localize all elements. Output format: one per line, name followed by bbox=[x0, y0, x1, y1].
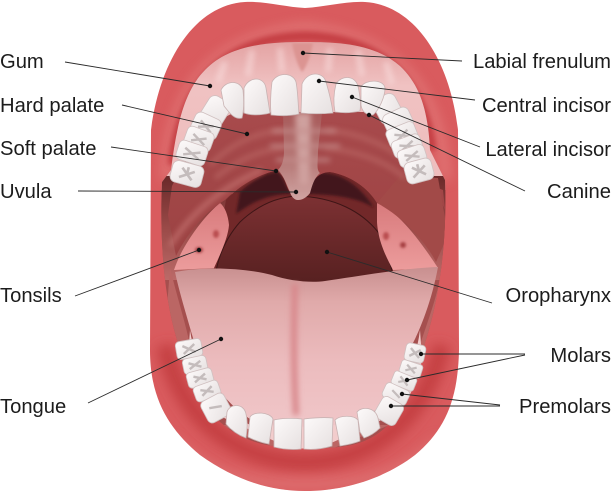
labels: right: Lateral incisor bbox=[485, 139, 611, 161]
labels: left: Hard palate bbox=[0, 95, 104, 117]
labels: left: Tongue bbox=[0, 396, 66, 418]
tonsil: left bbox=[174, 203, 229, 270]
back of the throat bbox=[214, 172, 393, 271]
labels: left: Tonsils bbox=[0, 285, 62, 307]
leader lines bbox=[65, 53, 525, 406]
labial frenulum bbox=[292, 43, 313, 72]
labels: right: Central incisor bbox=[482, 95, 611, 117]
oropharynx bbox=[214, 196, 395, 285]
labels: right: Oropharynx bbox=[506, 285, 611, 307]
lower incisors bbox=[226, 405, 380, 449]
labels: left bbox=[0, 51, 104, 418]
leader dots bbox=[197, 51, 423, 408]
tonsil: right bbox=[377, 203, 438, 270]
upper molars right bbox=[371, 91, 435, 185]
tongue bbox=[175, 267, 438, 427]
lower molars left bbox=[175, 338, 233, 425]
side walls of the throat bbox=[161, 176, 232, 280]
upper molars left bbox=[169, 93, 233, 189]
lips bbox=[150, 2, 459, 491]
upper gum bbox=[162, 42, 446, 190]
upper incisors bbox=[221, 74, 385, 118]
hard palate bbox=[168, 112, 445, 256]
labels: right: Canine bbox=[547, 181, 611, 203]
mouth interior bbox=[161, 42, 446, 448]
uvula and palatal raphe bbox=[270, 113, 340, 200]
lower molars right bbox=[373, 342, 427, 427]
labels: left: Soft palate bbox=[0, 138, 97, 160]
labels: right: Premolars bbox=[519, 396, 611, 418]
labels: left: Gum bbox=[0, 51, 44, 73]
illustration: open mouth bbox=[150, 2, 460, 491]
labels: right: Molars bbox=[550, 345, 611, 367]
labels: left: Uvula bbox=[0, 181, 52, 203]
floor of the mouth and lower gum bbox=[168, 280, 438, 448]
labels: right bbox=[473, 51, 611, 418]
labels: right: Labial frenulum bbox=[473, 51, 611, 73]
